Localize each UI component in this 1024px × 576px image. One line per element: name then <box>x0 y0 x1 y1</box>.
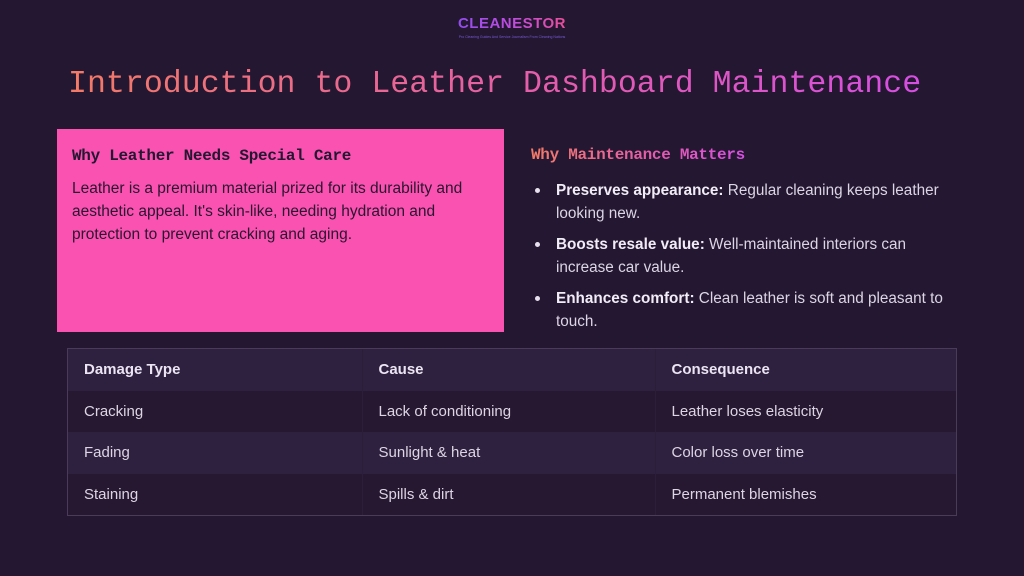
table: damage types: Damage Type <box>84 361 180 378</box>
table: damage types: Leather loses elasticity <box>672 403 823 420</box>
bullet list: increase car value. <box>556 259 684 276</box>
bullet list: touch. <box>556 313 598 330</box>
heading: Why Maintenance Matters <box>531 146 745 164</box>
table: damage types: Lack of conditioning <box>378 403 511 420</box>
body text: aesthetic appeal. It's skin-like, needing hydration and <box>72 203 435 220</box>
panel: why maintenance matters <box>531 146 943 330</box>
bullet list: Preserves appearance: Regular cleaning keeps leather <box>556 182 939 199</box>
table: damage types <box>67 348 957 516</box>
table: damage types: Cause <box>378 361 424 378</box>
table: damage types: Color loss over time <box>672 444 804 461</box>
body text: protection to prevent cracking and aging. <box>72 226 352 243</box>
title: Introduction to Leather Dashboard Maintenance <box>68 67 921 102</box>
logo: Pro Cleaning Guides And Service Journalism From Cleaning Nations <box>459 35 565 39</box>
bullet list: Enhances comfort: Clean leather is soft and pleasant to <box>556 290 943 307</box>
table: damage types: Staining <box>84 486 138 503</box>
bullet list: Boosts resale value: Well-maintained interiors can <box>556 236 906 253</box>
bullet list: looking new. <box>556 205 640 222</box>
heading: Why Leather Needs Special Care <box>72 147 351 165</box>
logo: CLEANESTOR <box>458 15 566 32</box>
body text <box>72 180 462 243</box>
table: damage types: Cracking <box>84 403 143 420</box>
table: damage types: Permanent blemishes <box>672 486 817 503</box>
body text: Leather is a premium material prized for its durability and <box>72 180 462 197</box>
table: damage types: Fading <box>84 444 130 461</box>
panel: why leather needs special care <box>57 129 504 332</box>
table: damage types: Consequence <box>672 361 770 378</box>
table: damage types: Spills & dirt <box>378 486 454 503</box>
table: damage types: Sunlight & heat <box>378 444 480 461</box>
bullet list <box>535 182 943 330</box>
